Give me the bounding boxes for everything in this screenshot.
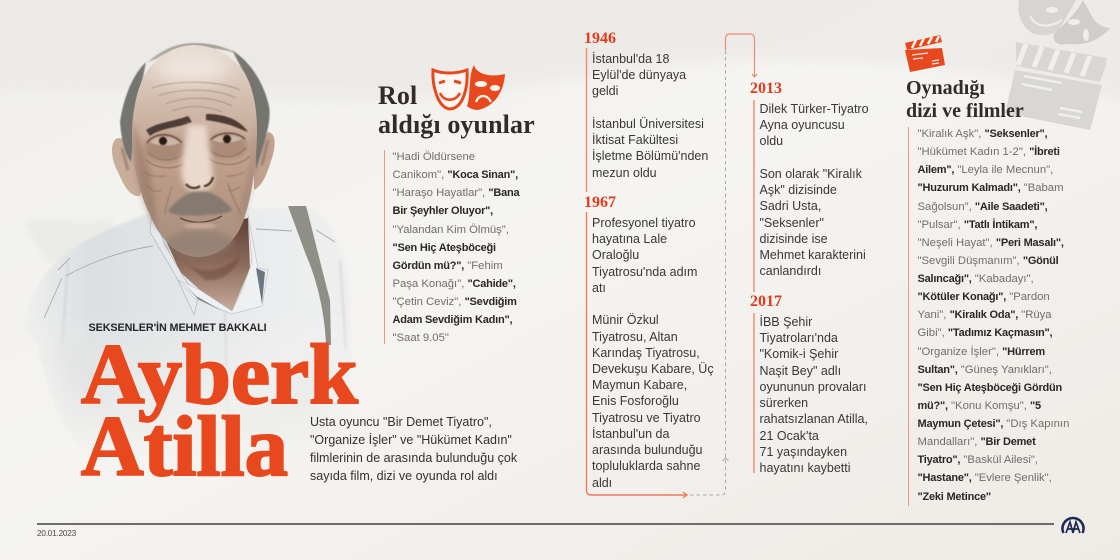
ink wash behind shoulder	[25, 218, 120, 261]
films list: "Sen Hiç Ateşböceği Gördün	[918, 382, 1062, 394]
ears	[112, 138, 146, 196]
text 1946: Eylül'de dünyaya	[592, 68, 686, 82]
text 1967: Tiyatrosu ve Tiyatro	[592, 411, 701, 425]
text 1967: Maymun Kabare,	[592, 378, 687, 392]
intro text: filmlerinin de arasında bulunduğu çok	[310, 451, 517, 465]
films list: "Huzurum Kalmadı", "Babam	[918, 182, 1064, 194]
text 2013: oldu	[760, 134, 783, 148]
text 2017: sürerken	[760, 396, 808, 410]
name title	[80, 326, 359, 494]
text 1967: Devekuşu Kabare, Üç	[592, 362, 714, 376]
text 2013: dizisinde ise	[760, 232, 828, 246]
films list: "Kiralık Aşk", "Seksenler",	[918, 128, 1047, 140]
neck	[165, 218, 250, 311]
heading: plays: Rol	[378, 81, 417, 110]
text 1946	[592, 52, 708, 180]
text 1967: İstanbul'un da	[592, 427, 669, 441]
films list: mü?", "Konu Komşu", "5	[918, 400, 1041, 412]
cheek wrinkles	[145, 172, 244, 214]
forehead highlight	[154, 52, 230, 84]
stubble chin	[166, 230, 234, 256]
text 2013: Son olarak "Kiralık	[760, 167, 862, 181]
nose	[181, 125, 213, 191]
plays list: "Çetin Ceviz", "Sevdiğim	[392, 296, 517, 308]
films list: "Hükümet Kadın 1-2", "İbreti	[918, 146, 1060, 158]
text 2017: rahatsızlanan Atilla,	[760, 412, 868, 426]
plays list: "Yalandan Kim Ölmüş",	[392, 224, 509, 236]
plays list: Paşa Konağı", "Cahide",	[392, 278, 516, 290]
plays list: Bir Şeyhler Oluyor",	[392, 205, 493, 217]
dashed return line	[690, 50, 726, 495]
films list: Maymun Çetesi", "Dış Kapının	[918, 418, 1069, 430]
plays list	[384, 150, 584, 344]
forehead wrinkles	[152, 82, 240, 112]
text 2013: "Seksenler"	[760, 216, 824, 230]
intro text	[310, 415, 518, 483]
lip	[180, 216, 222, 222]
plays list: Adam Sevdiğim Kadın",	[392, 314, 512, 326]
text 2017: hayatını kaybetti	[760, 461, 851, 475]
text 1967: arasında bulunduğu	[592, 443, 703, 457]
text 1946: İşletme Bölümü'nden	[592, 149, 708, 163]
text 1967: Oraloğlu	[592, 248, 639, 262]
text 2017: İBB Şehir	[760, 315, 812, 329]
date: 20.01.2023	[37, 529, 76, 538]
year 2013: 2013	[750, 80, 782, 97]
films list: "Pulsar", "Tatlı İntikam",	[918, 219, 1037, 231]
ghost sad mask	[1054, 0, 1110, 44]
text 1967: Münir Özkul	[592, 313, 659, 327]
heading: films	[906, 77, 1024, 122]
suspender strap	[288, 206, 331, 345]
films list: Salıncağı", "Kabadayı",	[918, 273, 1034, 285]
icon: AA logo	[1061, 516, 1085, 534]
films list: Ailem", "Leyla ile Mecnun",	[918, 164, 1053, 176]
solid line 1946	[586, 48, 588, 192]
subtitle: SEKSENLER'İN MEHMET BAKKALI	[88, 322, 267, 334]
films list: Sultan", "Güneş Yanıkları",	[918, 364, 1052, 376]
text 2017: 21 Ocak'ta	[760, 429, 819, 443]
text 1967: aldı	[592, 476, 612, 490]
eyebrows	[146, 114, 248, 136]
text 1967: atı	[592, 281, 606, 295]
films list: "Hastane", "Evlere Şenlik",	[918, 472, 1052, 484]
text 2017	[760, 314, 868, 475]
shirt	[34, 209, 348, 424]
plays list: "Haraşo Hayatlar", "Bana	[392, 187, 519, 199]
plays list: "Hadi Öldürsene	[392, 151, 475, 163]
plays list: "Saat 9.05"	[392, 332, 449, 344]
intro text: sayıda film, dizi ve oyunda rol aldı	[310, 469, 498, 483]
footer rule	[37, 523, 1054, 524]
text 1967: Enis Fosforoğlu	[592, 394, 679, 408]
text 2017: oyununun provaları	[760, 380, 867, 394]
icon: clapperboard	[905, 35, 945, 72]
films list: Gibi", "Tadımız Kaçmasın",	[918, 327, 1052, 339]
films list	[908, 127, 1079, 506]
text 1967: hayatına Lale	[592, 232, 667, 246]
heading: plays: aldığı oyunlar	[378, 110, 535, 139]
connector to 2013	[726, 34, 757, 77]
ghost clapperboard	[1005, 42, 1107, 130]
films list: "Organize İşler", "Hürrem	[918, 346, 1045, 358]
heading: films: dizi ve filmler	[906, 100, 1024, 122]
text 2013: Sadri Usta,	[760, 199, 821, 213]
text 1967: Profesyonel tiyatro	[592, 216, 696, 230]
films list: "Sevgili Düşmanım", "Gönül	[918, 255, 1059, 267]
text 1946: İktisat Fakültesi	[592, 133, 678, 147]
plays list: Gördün mü?", "Fehim	[392, 260, 503, 272]
side shading	[133, 120, 256, 232]
solid line 2013	[753, 100, 755, 292]
intro text: "Organize İşler" ve "Hükümet Kadın"	[310, 433, 512, 447]
face	[132, 45, 257, 257]
year 1967: 1967	[584, 194, 616, 210]
text 2017: Naşit Bey" adlı	[760, 364, 841, 378]
timeline connectors	[586, 33, 758, 498]
films list: "Zeki Metince"	[918, 490, 991, 502]
solid line 1967 with arrow	[586, 212, 687, 498]
moustache	[168, 192, 233, 216]
eye sockets	[144, 133, 248, 162]
films list: Tiyatro", "Baskül Ailesi",	[918, 454, 1038, 466]
text 2013: Mehmet karakterini	[760, 248, 866, 262]
decorative ghost masks and clapper	[1005, 0, 1110, 130]
solid line 2017	[753, 313, 755, 473]
text 1946: İstanbul Üniversitesi	[592, 117, 704, 131]
text 1967: Tiyatrosu'nda adım	[592, 265, 697, 279]
films list: Yani", "Kiralık Oda", "Rüya	[918, 309, 1052, 321]
text 1946: mezun oldu	[592, 166, 657, 180]
portrait photo	[34, 42, 348, 424]
ghost happy mask	[1018, 0, 1076, 35]
text 2017: "Komik-i Şehir	[760, 347, 838, 361]
intro text: Usta oyuncu "Bir Demet Tiyatro",	[310, 415, 492, 429]
plays list: "Sen Hiç Ateşböceği	[392, 242, 496, 254]
text 2013: Dilek Türker-Tiyatro	[760, 102, 869, 116]
text 1946: İstanbul'da 18	[592, 52, 669, 66]
year 2017: 2017	[750, 293, 782, 310]
films list: Mandalları", "Bir Demet	[918, 436, 1036, 448]
text 2013: canlandırdı	[760, 264, 821, 278]
text 1967: Karındaş Tiyatrosu,	[592, 346, 700, 360]
text 2013	[760, 102, 869, 278]
text 1946: geldi	[592, 84, 618, 98]
hair	[120, 43, 270, 170]
collar	[150, 212, 268, 315]
year 1946: 1946	[584, 30, 616, 47]
heading: plays	[378, 81, 535, 139]
text 2013: Aşk" dizisinde	[760, 183, 837, 197]
text 2017: 71 yaşındayken	[760, 445, 847, 459]
text 1967: topluluklarda sahne	[592, 459, 700, 473]
text 2017: Tiyatroları'nda	[760, 331, 838, 345]
heading: films: Oynadığı	[906, 77, 985, 99]
name title: Atilla	[81, 398, 288, 494]
name title: Ayberk	[81, 326, 358, 422]
eyes	[146, 133, 250, 168]
text 1967: Tiyatrosu, Altan	[592, 330, 678, 344]
films list: "Neşeli Hayat", "Peri Masalı",	[918, 237, 1064, 249]
icon: theatre masks	[431, 65, 505, 110]
text 2013: Ayna oyuncusu	[760, 118, 845, 132]
films list: Sağolsun", "Aile Saadeti",	[918, 200, 1047, 212]
text 1967	[592, 216, 714, 490]
films list: "Kötüler Konağı", "Pardon	[918, 291, 1050, 303]
plays list: Canikom", "Koca Sinan",	[392, 169, 518, 181]
